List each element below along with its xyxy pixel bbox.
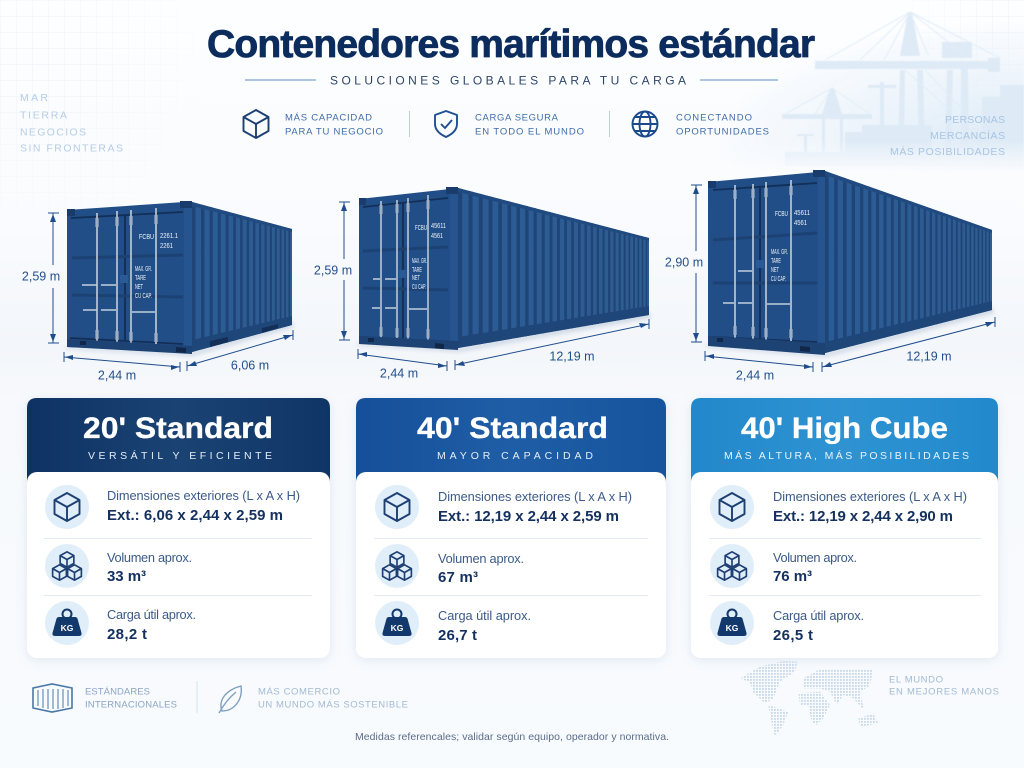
card header [691, 398, 998, 482]
door markings: TARE [771, 258, 781, 265]
card header: 40' High Cube [741, 412, 948, 445]
row: dimensions: Dimensiones exteriores (L x A x H) [438, 489, 632, 504]
row: volume: 67 m³ [438, 569, 478, 586]
dimension: height [665, 185, 703, 342]
door markings: MAX. GR. [412, 258, 427, 265]
footer: world text: EL MUNDO [889, 674, 943, 686]
benefits row [244, 110, 769, 138]
subtitle with rules: SOLUCIONES GLOBALES PARA TU CARGA [330, 74, 686, 88]
row: volume [710, 544, 857, 588]
row: payload: KG [61, 623, 74, 633]
door markings: TARE [135, 275, 146, 282]
dimension: height [22, 213, 60, 343]
door markings [135, 233, 178, 300]
side text right: MÁS POSIBILIDADES [890, 145, 1005, 158]
corrugated side [449, 188, 649, 348]
doors [67, 201, 192, 354]
row: payload: Carga útil aprox. [107, 607, 196, 622]
benefit: secure cargo [435, 111, 584, 138]
door markings: NET [412, 275, 420, 282]
dimension: width: 2,44 m [380, 366, 418, 380]
side text left: MAR [20, 92, 48, 104]
benefit: capacity: PARA TU NEGOCIO [285, 126, 383, 138]
dimension: height [314, 202, 352, 340]
row: payload: KG [726, 623, 739, 633]
footer: sustainability: UN MUNDO MÁS SOSTENIBLE [258, 700, 408, 710]
door markings [771, 210, 810, 283]
benefit: connecting [632, 112, 769, 138]
panel: 20 standard [27, 398, 330, 658]
door markings: 4561 [794, 220, 807, 227]
dimension: width: 2,44 m [98, 368, 136, 382]
door markings: FCBU [415, 225, 427, 232]
side text left: SIN FRONTERAS [20, 142, 123, 154]
dimension: width [705, 351, 813, 382]
container 40 standard [314, 187, 651, 380]
benefit: connecting: CONECTANDO [676, 112, 752, 124]
row: payload [710, 601, 864, 645]
footer: standards: INTERNACIONALES [85, 700, 177, 710]
door markings: CU CAP. [135, 293, 152, 300]
footer: world text: EN MEJORES MANOS [889, 686, 999, 698]
door markings: CU CAP. [412, 284, 426, 291]
container 40 high cube [665, 170, 995, 382]
doors [359, 187, 458, 350]
row: payload: KG [391, 623, 404, 633]
benefit: secure cargo: EN TODO EL MUNDO [475, 126, 584, 138]
footnote: Medidas referencales; validar según equipo, operador y normativa. [355, 731, 669, 743]
card header [356, 398, 666, 482]
row: dimensions [45, 485, 300, 529]
door markings: CU CAP. [771, 276, 786, 283]
container 20 standard [22, 201, 294, 382]
row: payload [375, 601, 531, 645]
benefit: connecting: OPORTUNIDADES [676, 126, 769, 138]
row: volume: Volumen aprox. [773, 550, 857, 565]
door markings: 2261.1 [160, 233, 178, 240]
door markings: NET [135, 284, 143, 291]
corrugated side [817, 171, 992, 353]
door markings: FCBU [139, 234, 154, 241]
row: volume: Volumen aprox. [438, 551, 524, 566]
background [0, 0, 1024, 138]
door markings [412, 223, 446, 291]
row: payload: 26,7 t [438, 627, 477, 644]
door markings: 45611 [794, 210, 810, 217]
benefit: capacity [244, 110, 383, 138]
door markings: 4561 [431, 233, 443, 240]
icon: container [33, 684, 72, 712]
doors [708, 170, 825, 355]
row: payload: 28,2 t [107, 626, 147, 643]
row: payload: Carga útil aprox. [438, 608, 531, 623]
row: dimensions: Dimensiones exteriores (L x A x H) [773, 489, 967, 504]
door markings: FCBU [775, 211, 788, 218]
footer: standards: ESTÁNDARES [85, 686, 150, 698]
benefit: secure cargo: CARGA SEGURA [475, 112, 559, 124]
dimension: height: 2,59 m [314, 264, 352, 278]
corrugated side [183, 202, 292, 352]
dimension: length [187, 330, 293, 372]
dimension: length: 12,19 m [549, 350, 595, 364]
card header: VERSÁTIL Y EFICIENTE [88, 449, 272, 462]
row: dimensions [710, 485, 967, 529]
row: payload: Carga útil aprox. [773, 608, 864, 623]
card header: 20' Standard [83, 412, 273, 445]
door markings: TARE [412, 267, 422, 274]
panel: 40 high cube [691, 398, 998, 658]
row: volume [45, 544, 192, 588]
row: dimensions: Ext.: 12,19 x 2,44 x 2,90 m [773, 508, 953, 525]
row: dimensions: Ext.: 12,19 x 2,44 x 2,59 m [438, 508, 619, 525]
card header: MAYOR CAPACIDAD [437, 450, 593, 462]
dimension: width: 2,44 m [736, 368, 774, 382]
dimension: height: 2,90 m [665, 256, 703, 270]
card header: MÁS ALTURA, MÁS POSIBILIDADES [724, 449, 969, 462]
dimension: length: 6,06 m [231, 358, 269, 372]
dimension: length [822, 317, 995, 372]
card header [27, 398, 330, 482]
door markings: MAX. GR. [135, 266, 152, 273]
icon: leaf [219, 686, 241, 713]
side text right: MERCANCÍAS [930, 129, 1005, 142]
card header: 40' Standard [417, 412, 608, 445]
door markings: NET [771, 267, 779, 274]
footer: sustainability: MÁS COMERCIO [258, 686, 340, 698]
row: dimensions: Dimensiones exteriores (L x A x H) [107, 488, 300, 503]
row: dimensions [375, 485, 632, 529]
door markings: MAX. GR. [771, 249, 788, 256]
side text left: NEGOCIOS [20, 126, 86, 138]
side text right: PERSONAS [945, 114, 1005, 126]
footer: standards [33, 684, 177, 712]
row: volume: Volumen aprox. [107, 550, 192, 565]
row: payload: 26,5 t [773, 627, 813, 644]
row: volume [375, 544, 524, 588]
row: payload [45, 601, 196, 645]
panel: 40 standard [356, 398, 666, 658]
dimension: height: 2,59 m [22, 270, 60, 284]
door markings: 45611 [431, 223, 446, 230]
row: volume: 33 m³ [107, 568, 146, 585]
row: volume: 76 m³ [773, 568, 812, 585]
dotted world map [740, 661, 878, 737]
dimension: width [358, 349, 447, 380]
row: dimensions: Ext.: 6,06 x 2,44 x 2,59 m [107, 507, 283, 524]
dimension: length [455, 319, 649, 370]
benefit: capacity: MÁS CAPACIDAD [285, 112, 372, 124]
dimension: length: 12,19 m [906, 350, 952, 364]
door markings: 2261 [160, 243, 173, 250]
port cranes silhouette [782, 12, 1024, 163]
dimension: width [64, 352, 180, 382]
side text left: TIERRA [20, 110, 67, 122]
title: Contenedores marítimos estándar [207, 23, 815, 66]
footer: sustainability [219, 686, 408, 713]
